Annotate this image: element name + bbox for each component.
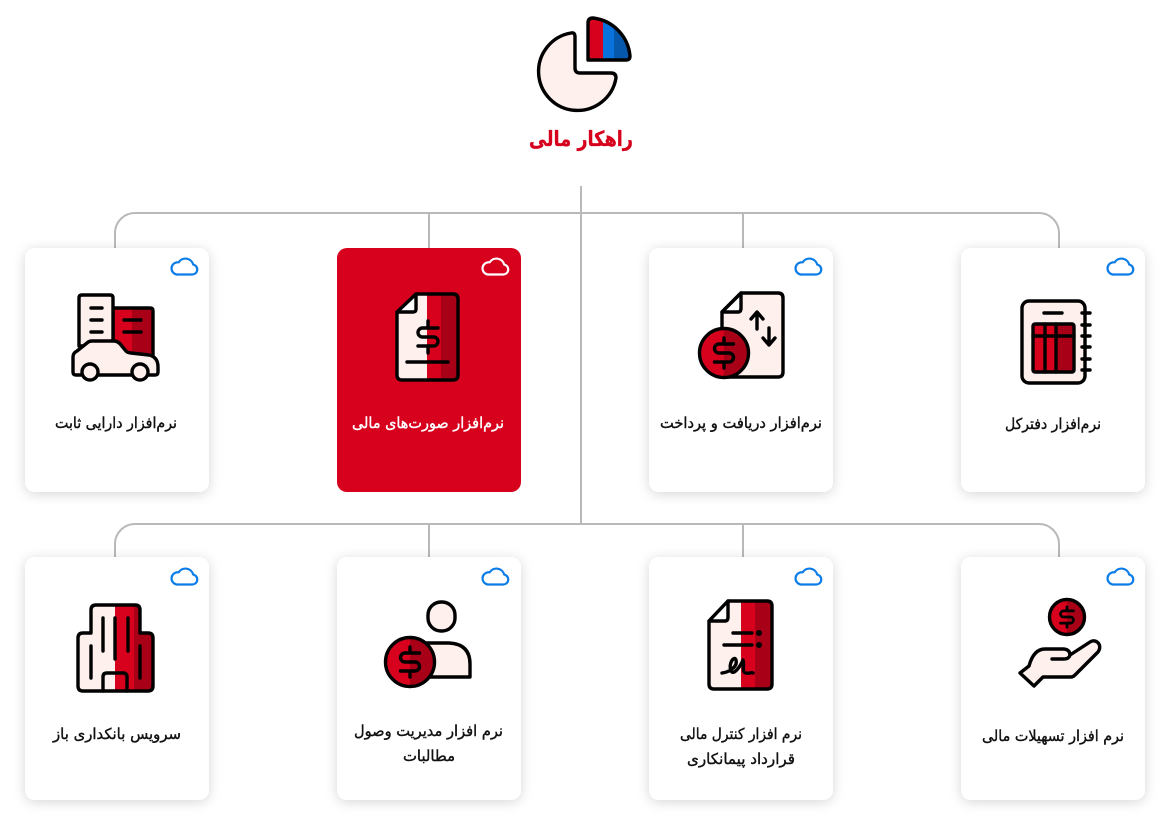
icon: bank towers [78,605,153,691]
title: راهکار مالی [529,127,633,151]
icon: cloud [483,569,508,585]
icon: cloud [796,569,821,585]
icon: cloud [172,569,197,585]
label [354,722,503,765]
label: قرارداد پیمانکاری [687,750,795,769]
label: نرم‌افزار دفترکل [1005,415,1101,433]
label [680,725,802,769]
icon: document with coin [700,293,783,378]
icon: cloud [796,259,821,275]
card: financial statements software (highlighted) [337,248,521,492]
icon: signed contract [709,601,772,689]
label: نرم افزار کنترل مالی [680,725,802,743]
label: نرم‌افزار دریافت و پرداخت [660,414,822,433]
connector: bottom row [115,524,1059,557]
card: contract financial control software [649,557,833,800]
icon: ledger notebook [1022,301,1090,383]
card: open banking service [25,557,209,800]
connector: top row [115,186,1059,524]
card: receipts and payments software [649,248,833,492]
label: سرویس بانکداری باز [52,725,181,743]
card: financial facilities software [961,557,1145,800]
label: مطالبات [403,747,455,765]
icon: cloud [172,259,197,275]
icon: hand holding coin [1020,600,1100,686]
icon: cloud [483,259,508,275]
label: نرم افزار تسهیلات مالی [982,727,1124,745]
card: fixed assets software [25,248,209,492]
icon: cloud [1108,569,1133,585]
icon: financial document [397,294,458,380]
label: نرم‌افزار دارایی ثابت [55,414,177,432]
card: ledger software [961,248,1145,492]
label: نرم‌افزار صورت‌های مالی [352,414,504,432]
label: نرم افزار مدیریت وصول [354,722,503,740]
icon: person with coin [386,602,470,686]
icon: cloud [1108,259,1133,275]
icon: pie chart [539,18,630,110]
icon: buildings and car [73,295,158,380]
card: receivables management software [337,557,521,800]
